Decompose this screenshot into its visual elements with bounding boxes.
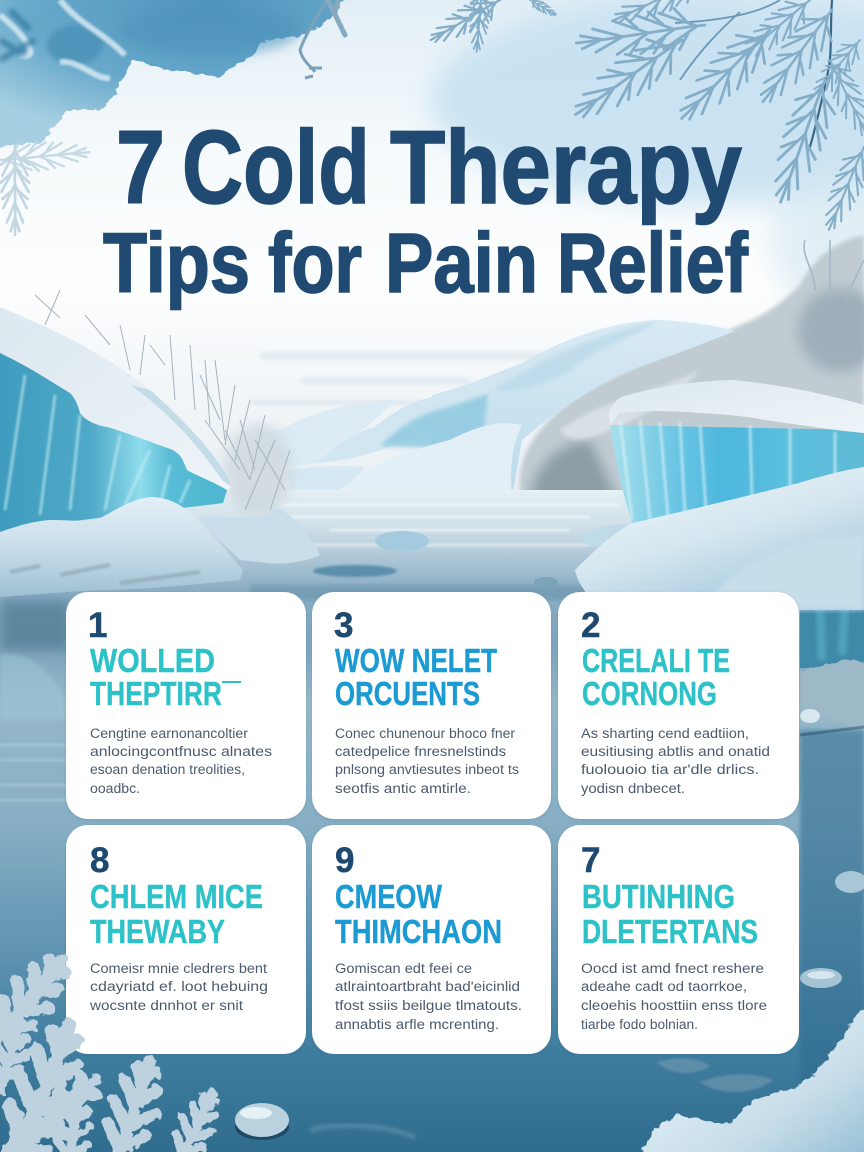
card 1: esoan denation treolities, (90, 762, 245, 777)
card 1: ooadbc. (90, 781, 140, 796)
card 4: CHLEM MICE (90, 878, 263, 915)
frost plants, bottom left (0, 946, 226, 1152)
card 6: adeahe cadt od taorrkoe, (581, 979, 747, 994)
card 1: WOLLED (90, 642, 215, 679)
ice stones on the water (235, 871, 864, 1140)
snow hills, mid distance (260, 320, 735, 497)
card 6: BUTINHING (582, 878, 735, 915)
card 3: As sharting cend eadtiion, (581, 726, 749, 741)
card 5: atlraintoartbraht bad'eicinlid (335, 979, 520, 994)
card 5: Gomiscan edt feei ce (335, 961, 472, 976)
card 5: annabtis arfle mcrenting. (335, 1017, 499, 1032)
card 6: DLETERTANS (582, 913, 758, 950)
card 5 (312, 825, 551, 1054)
card 3: 2 (581, 606, 600, 645)
card 6: tiarbe fodo bolnian. (581, 1017, 698, 1032)
frosted trees and bushes, right (520, 235, 864, 505)
card 4: 8 (90, 841, 109, 880)
card 1: THEPTIRR (90, 675, 222, 712)
card 4: Comeisr mnie cledrers bent (90, 961, 267, 976)
card 2: ORCUENTS (335, 675, 480, 712)
left ice shelf with snow cap (0, 307, 232, 532)
card 1 (66, 592, 306, 819)
card 3: CORNONG (582, 675, 717, 712)
title (103, 110, 749, 310)
card 3 (558, 592, 799, 819)
card 4: cdayriatd ef. loot hebuing (90, 979, 268, 994)
snow banks, right foreground (575, 467, 864, 610)
title: for (268, 216, 362, 310)
frosted branches, top right (424, 0, 864, 235)
snow banks, left foreground (0, 497, 558, 597)
card 1: anlocingcontfnusc alnates (90, 744, 272, 759)
card 2 (312, 592, 551, 819)
background: winter sky (0, 0, 864, 520)
frozen water (0, 490, 864, 1152)
card 6 (558, 825, 799, 1054)
card 5: THIMCHAON (335, 913, 502, 950)
card 2: seotfis antic amtirle. (335, 781, 471, 796)
right ice shelf with snow cap (609, 380, 864, 523)
title: Tips (103, 216, 250, 310)
card 5: 9 (335, 841, 354, 880)
card 3: CRELALI TE (582, 642, 730, 679)
card 2: catedpelice fnresnelstinds (335, 744, 506, 759)
card 5: tfost ssiis beilgue tlmatouts. (335, 998, 522, 1013)
card 4 (66, 825, 306, 1054)
card 1: Cengtine earnonancoltier (90, 726, 249, 741)
card 3: eusitiusing abtlis and onatid (581, 744, 770, 759)
card 5: CMEOW (335, 878, 443, 915)
card 6: Oocd ist amd fnect reshere (581, 961, 764, 976)
snow drift, bottom right (625, 1005, 864, 1152)
card 6: cleoehis hoosttiin enss tlore (581, 998, 767, 1013)
card 2: 3 (334, 606, 353, 645)
title: Relief (557, 216, 749, 310)
bare frosted twigs behind left shelf (35, 290, 292, 516)
card 3: yodisn dnbecet. (581, 781, 685, 796)
card 6: 7 (581, 841, 600, 880)
card 4: THEWABY (90, 913, 225, 950)
ice cave overhang, top left (0, 0, 360, 150)
card 1: 1 (88, 606, 107, 645)
card 2: Conec chunenour bhoco fner (335, 726, 516, 741)
hanging twig and frost, top left (0, 0, 345, 235)
card 2: pnlsong anvtiesutes inbeot ts (335, 762, 519, 777)
card 4: wocsnte dnnhot er snit (89, 998, 243, 1013)
title: Pain (385, 216, 538, 310)
title: Cold (182, 110, 370, 226)
frost plant and rock, right edge (800, 661, 864, 735)
card 2: WOW NELET (335, 642, 497, 679)
title: 7 (116, 110, 165, 226)
card 3: fuolouoio tia ar'dle drlics. (581, 762, 759, 777)
title: Therapy (390, 110, 742, 226)
